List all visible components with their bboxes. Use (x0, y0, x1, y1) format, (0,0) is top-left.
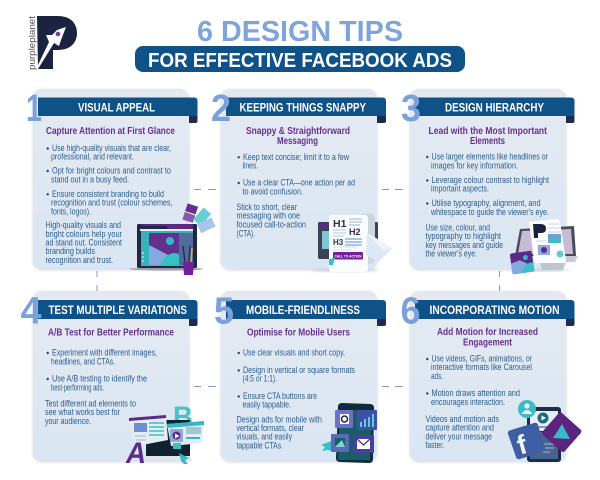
bullet list: Utilise typography, alignment, and (432, 198, 540, 208)
bullet list: lines. (242, 161, 258, 171)
card background (221, 291, 377, 461)
bullet list: Ensure CTA buttons are (243, 391, 317, 401)
subheading (437, 327, 538, 348)
icon: video, play and facebook tiles: f (513, 429, 531, 461)
panel 5: mobile-friendliness (214, 290, 386, 463)
subheading (246, 126, 350, 147)
subheading: Lead with the Most Important (428, 126, 548, 137)
bullet list: best-performing ads. (51, 383, 104, 393)
summary text (46, 220, 122, 265)
icon: A/B test screens: A (125, 437, 146, 470)
summary text: faster. (426, 440, 444, 450)
bullet list: headlines, and CTAs. (51, 357, 115, 367)
summary text: High-quality visuals and (46, 220, 121, 230)
icon: heading hierarchy page and envelope: H1 (333, 218, 347, 230)
ribbon header: VISUAL APPEAL (78, 102, 155, 114)
summary text (236, 202, 306, 239)
ribbon header (226, 300, 386, 326)
summary text: branding builds (46, 246, 95, 256)
bullet list: Ensure consistent branding to build (52, 189, 164, 199)
summary text: bright colours help your (46, 229, 122, 239)
summary text: messaging with one (236, 211, 300, 221)
panel 3: design hierarchy (401, 88, 578, 274)
summary text: focused call-to-action (236, 220, 306, 230)
summary text: recognition and trust. (46, 255, 113, 265)
ribbon header (226, 98, 386, 123)
bullet list: stand out in a busy feed. (51, 175, 129, 185)
summary text: tappable CTAs. (236, 441, 283, 451)
bullet list (426, 354, 532, 407)
card background (221, 89, 377, 269)
number 1: 1 (26, 88, 42, 130)
bullet list: images for key information. (431, 161, 518, 171)
summary text (45, 399, 136, 426)
number 5: 5 (214, 290, 234, 332)
ribbon header: DESIGN HIERARCHY (445, 102, 544, 114)
summary text: your audience. (45, 416, 91, 426)
card background (410, 89, 566, 269)
ribbon header: TEST MULTIPLE VARIATIONS (48, 305, 187, 317)
panel 6: incorporating motion (400, 290, 581, 462)
logo: purpleplanet: purpleplanet (27, 15, 37, 70)
subheading: Elements (470, 136, 505, 147)
subheading (428, 126, 548, 147)
icon: laptop with colour swatches (129, 203, 216, 275)
summary text: the viewer's eye. (426, 249, 477, 259)
card background (410, 291, 566, 461)
subheading: A/B Test for Better Performance (48, 328, 174, 338)
summary text (426, 223, 503, 259)
summary text: Use size, colour, and (426, 223, 490, 233)
logo: purpleplanet (27, 15, 77, 70)
icon: heading hierarchy page and envelope: H3 (333, 238, 344, 247)
bullet list: important aspects. (431, 184, 489, 194)
summary text: key messages and guide (426, 240, 503, 250)
summary text: Videos and motion ads (426, 414, 499, 424)
summary text (236, 415, 322, 451)
icon: heading hierarchy page and envelope: CALL TO ACTION (334, 255, 362, 259)
bullet list: Keep text concise; limit it to a few (243, 152, 349, 162)
number 4: 4 (20, 290, 42, 332)
bullet list: Use videos, GIFs, animations, or (432, 354, 532, 364)
summary text: deliver your message (426, 432, 492, 442)
bullet list: ads. (431, 371, 443, 381)
ribbon header: KEEPING THINGS SNAPPY (240, 102, 366, 114)
icon: video, play and facebook tiles (508, 400, 581, 462)
bullet list: encourages interaction. (431, 397, 505, 407)
icon: heading hierarchy page and envelope: H2 (349, 227, 361, 237)
subheading: Snappy & Straightforward (246, 126, 350, 137)
summary text: visuals, and easily (236, 432, 292, 442)
summary text: (CTA). (236, 229, 255, 239)
summary text: typography to highlight (426, 231, 501, 241)
panel 1: visual appeal (26, 88, 216, 275)
bullet list: interactive formats like Carousel (431, 362, 532, 372)
subtitle banner: FOR EFFECTIVE FACEBOOK ADS (148, 49, 452, 72)
card background (33, 291, 189, 461)
subheading: Messaging (277, 136, 318, 147)
summary text: see what works best for (45, 407, 120, 417)
bullet list (238, 152, 355, 197)
icon: tablet and layout page (510, 219, 578, 274)
title: 6 DESIGN TIPS (197, 16, 403, 48)
bullet list: Experiment with different images, (52, 348, 157, 358)
bullet list: professional, and relevant. (51, 152, 134, 162)
summary text: Design ads for mobile with (236, 415, 322, 425)
bullet list: Use a clear CTA—one action per ad (243, 178, 355, 188)
summary text: Stick to short, clear (236, 202, 297, 212)
summary text: vertical formats, clear (236, 423, 304, 433)
bullet list: Motion draws attention and (432, 388, 520, 398)
bullet list: Use clear visuals and short copy. (243, 348, 345, 358)
ribbon header (38, 98, 198, 123)
bullet list: Use larger elements like headlines or (432, 152, 548, 162)
number 6: 6 (400, 290, 420, 332)
bullet list: Use A/B testing to identify the (52, 374, 147, 384)
ribbon header (415, 98, 574, 123)
summary text (426, 414, 499, 450)
summary text: ad stand out. Consistent (46, 237, 122, 247)
icon: A/B test screens: B (173, 401, 193, 434)
panel 4: test multiple variations (20, 290, 204, 470)
ribbon header (38, 300, 198, 326)
subheading: Capture Attention at First Glance (46, 126, 175, 137)
bullet list: whitespace to guide the viewer's eye. (430, 207, 549, 217)
bullet list: easily tappable. (242, 400, 291, 410)
bullet list: Design in vertical or square formats (243, 365, 355, 375)
bullet list: Use high-quality visuals that are clear, (52, 143, 171, 153)
card background (33, 89, 189, 269)
icon: mobile phone with app tiles (321, 403, 377, 463)
bullet list: recognition and trust (colour schemes, (51, 198, 172, 208)
panel 2: keeping things snappy (211, 88, 393, 272)
bullet list (238, 348, 355, 410)
ribbon header: MOBILE-FRIENDLINESS (246, 305, 360, 317)
summary text: capture attention and (426, 423, 494, 433)
summary text: Test different ad elements to (45, 399, 136, 409)
subheading: Engagement (463, 338, 513, 348)
number 2: 2 (211, 88, 231, 130)
bullet list: to avoid confusion. (242, 187, 303, 197)
ribbon header: INCORPORATING MOTION (430, 305, 560, 317)
ribbon header (415, 300, 574, 326)
icon: A/B test screens (125, 401, 204, 470)
bullet list (46, 143, 172, 217)
bullet list (426, 152, 549, 217)
bullet list: Opt for bright colours and contrast to (52, 166, 171, 176)
bullet list: (4:5 or 1:1). (242, 374, 277, 384)
bullet list: fonts, logos). (51, 207, 91, 217)
subheading: Optimise for Mobile Users (247, 328, 350, 338)
connectors (97, 190, 500, 386)
number 3: 3 (401, 88, 421, 130)
bullet list: Leverage colour contrast to highlight (432, 175, 549, 185)
subheading: Add Motion for Increased (437, 327, 538, 338)
bullet list (46, 348, 157, 393)
icon: heading hierarchy page and envelope (311, 214, 393, 272)
